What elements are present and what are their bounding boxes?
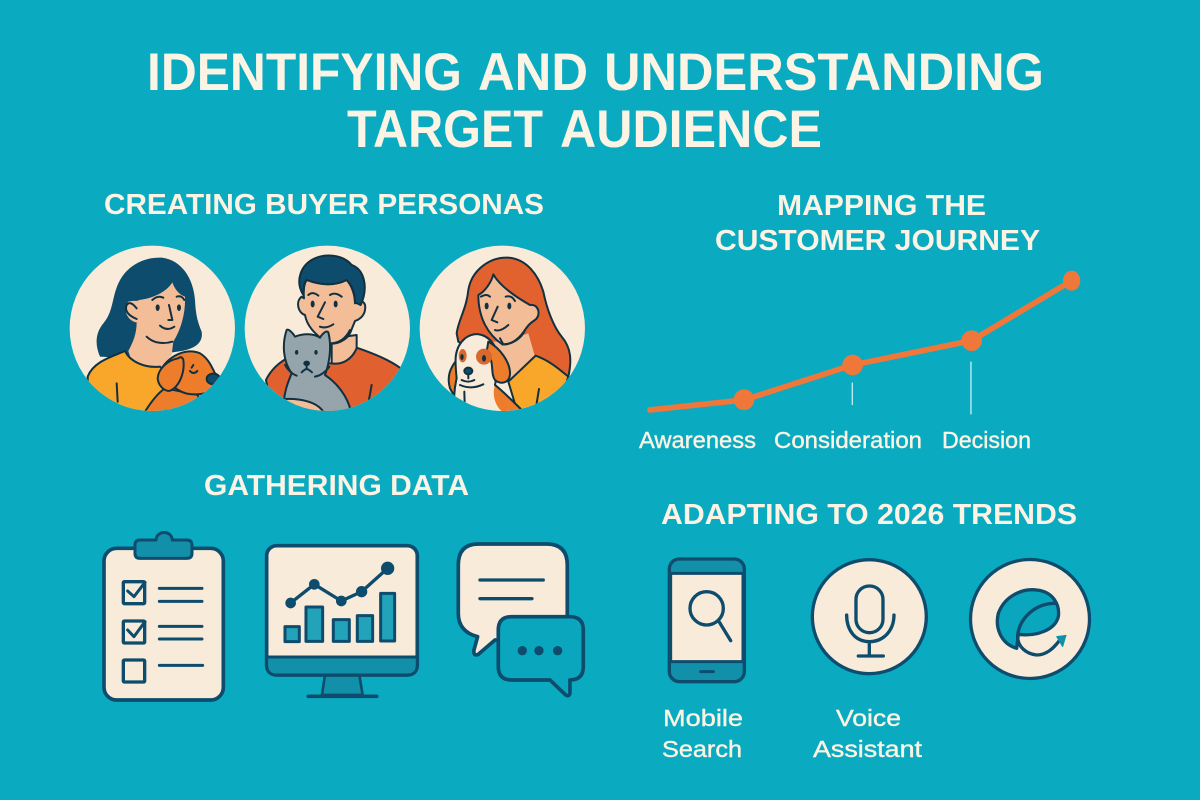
title: AND <box>478 43 588 102</box>
title <box>147 43 1044 159</box>
heading: mapping the customer journey <box>715 190 1040 257</box>
persona: man with cat <box>245 246 410 415</box>
journey stage labels: Awareness <box>639 427 756 453</box>
icon: speech bubbles <box>458 544 583 696</box>
panel: gathering data icons <box>104 532 583 700</box>
title: IDENTIFYING <box>147 43 462 102</box>
heading: mapping the customer journey: MAPPING THE <box>777 190 986 222</box>
journey stage labels: Consideration <box>774 427 922 453</box>
heading: adapting to 2026 trends: ADAPTING TO 2026 TRENDS <box>661 499 1077 531</box>
icon: mobile search <box>669 559 744 682</box>
trend labels: Voice <box>836 705 901 731</box>
title: AUDIENCE <box>560 100 822 159</box>
panel: trend icons <box>669 559 1090 682</box>
trend labels <box>662 705 923 762</box>
trend labels: Mobile <box>663 705 743 731</box>
journey stage labels <box>639 427 1031 453</box>
heading: gathering data: GATHERING DATA <box>204 470 469 502</box>
trend labels: Assistant <box>813 736 923 762</box>
trend labels: Search <box>662 736 742 762</box>
persona: woman with puppy <box>420 246 585 415</box>
title: TARGET <box>347 100 543 159</box>
heading: mapping the customer journey: CUSTOMER JOURNEY <box>715 225 1040 257</box>
panel: buyer personas <box>70 246 585 415</box>
icon: eco leaf with arrow <box>970 560 1090 678</box>
chart: customer journey line <box>650 271 1080 414</box>
journey stage labels: Decision <box>942 427 1031 453</box>
persona: woman with dog <box>70 246 235 415</box>
icon: voice assistant microphone <box>812 560 926 674</box>
icon: monitor with chart <box>267 546 417 696</box>
heading: creating buyer personas: CREATING BUYER PERSONAS <box>104 189 544 221</box>
icon: clipboard checklist <box>104 532 223 700</box>
title: UNDERSTANDING <box>604 43 1044 102</box>
